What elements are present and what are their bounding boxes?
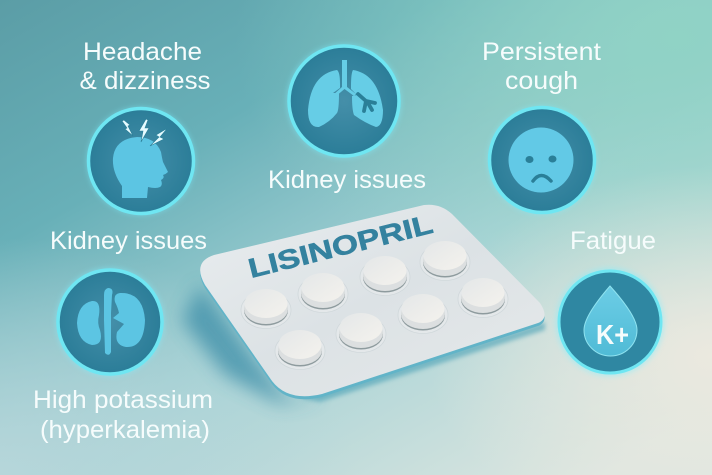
pill xyxy=(298,273,348,312)
pill xyxy=(360,256,410,296)
pill xyxy=(241,289,291,328)
pill xyxy=(398,294,448,334)
heading: high potassium: (hyperkalemia) xyxy=(40,416,210,444)
icon: lungs xyxy=(287,44,401,158)
heading: headache and dizziness: & dizziness xyxy=(80,67,210,95)
heading: persistent cough: cough xyxy=(505,67,578,95)
heading: high potassium: High potassium xyxy=(33,386,213,414)
heading: high potassium xyxy=(33,386,213,444)
blister pack xyxy=(182,205,545,404)
blister plate edge xyxy=(200,208,545,399)
pill xyxy=(336,313,386,352)
icon: kidneys xyxy=(56,268,164,376)
icon: sad face xyxy=(488,106,596,214)
product name: LISINOPRIL xyxy=(245,209,436,284)
heading: kidney issues (center): Kidney issues xyxy=(268,166,426,194)
heading: persistent cough: Persistent xyxy=(482,38,601,66)
pill xyxy=(275,330,325,370)
blister shadow xyxy=(182,285,325,404)
heading: headache and dizziness xyxy=(80,38,210,95)
icon: potassium drop: K+ xyxy=(596,319,629,350)
heading: fatigue: Fatigue xyxy=(570,227,656,255)
heading: persistent cough xyxy=(482,38,601,95)
blister plate xyxy=(200,205,545,396)
heading: kidney issues (left): Kidney issues xyxy=(50,227,207,255)
pill xyxy=(458,278,508,318)
heading: headache and dizziness: Headache xyxy=(83,38,202,66)
pill xyxy=(420,241,470,280)
icon: potassium drop xyxy=(556,268,664,376)
icon: headache head xyxy=(87,107,195,215)
